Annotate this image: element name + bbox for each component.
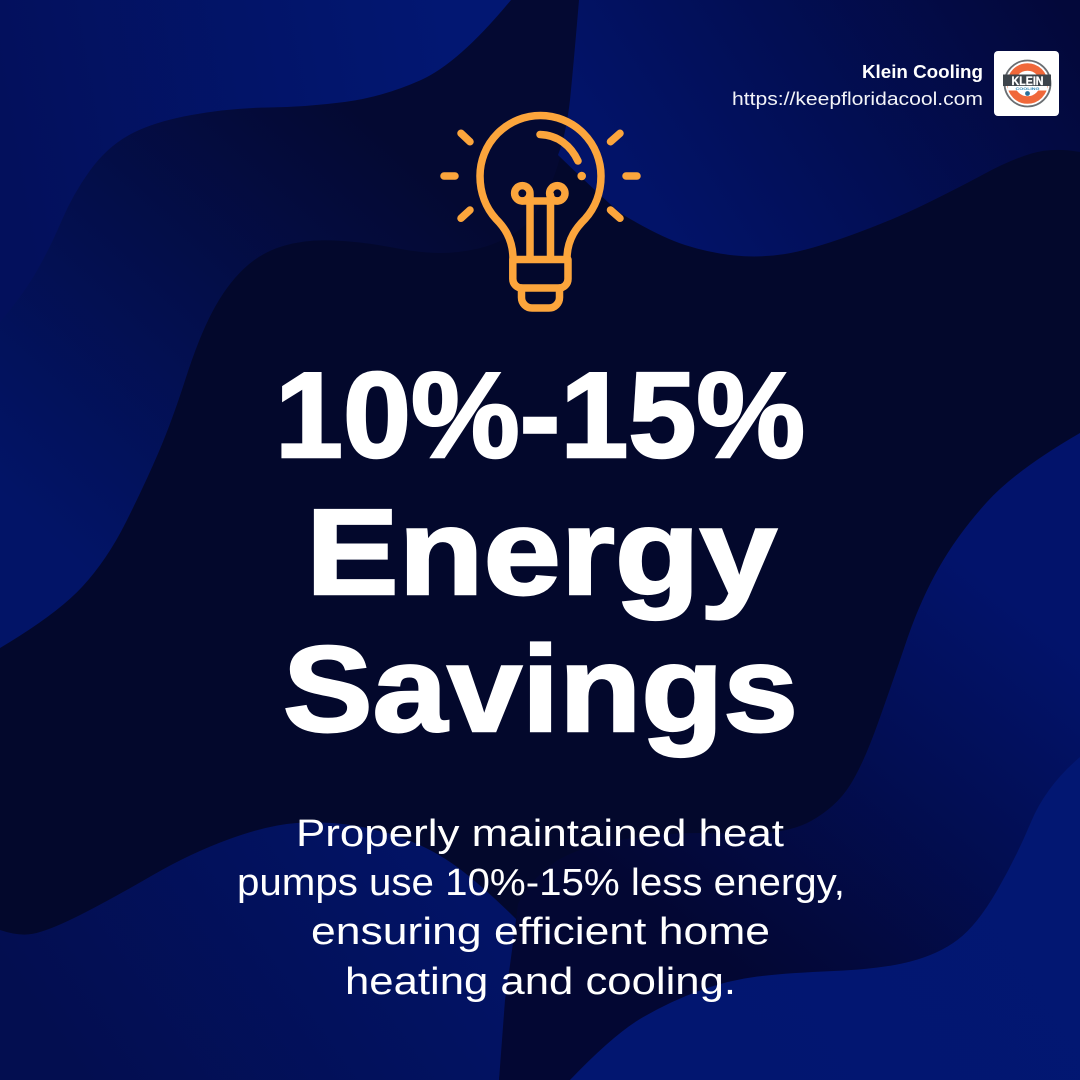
brand name: Klein Cooling: [862, 61, 983, 82]
logo badge: [994, 51, 1059, 116]
brand header: [732, 51, 1059, 116]
title line 1: 10%-15%: [275, 347, 805, 483]
body text: Properly maintained heat: [296, 813, 784, 855]
title line 3: Savings: [283, 621, 798, 757]
body text: ensuring efficient home: [311, 911, 770, 953]
title: [275, 347, 805, 757]
body text: heating and cooling.: [345, 961, 736, 1003]
body text: pumps use 10%-15% less energy,: [237, 862, 845, 904]
logo badge: KLEIN: [1012, 74, 1044, 88]
icon: light bulb: [444, 116, 637, 308]
logo badge: COOLING: [1016, 86, 1040, 91]
title line 2: Energy: [306, 484, 777, 620]
body text: [237, 813, 845, 1003]
website url: https://keepfloridacool.com: [732, 88, 983, 109]
